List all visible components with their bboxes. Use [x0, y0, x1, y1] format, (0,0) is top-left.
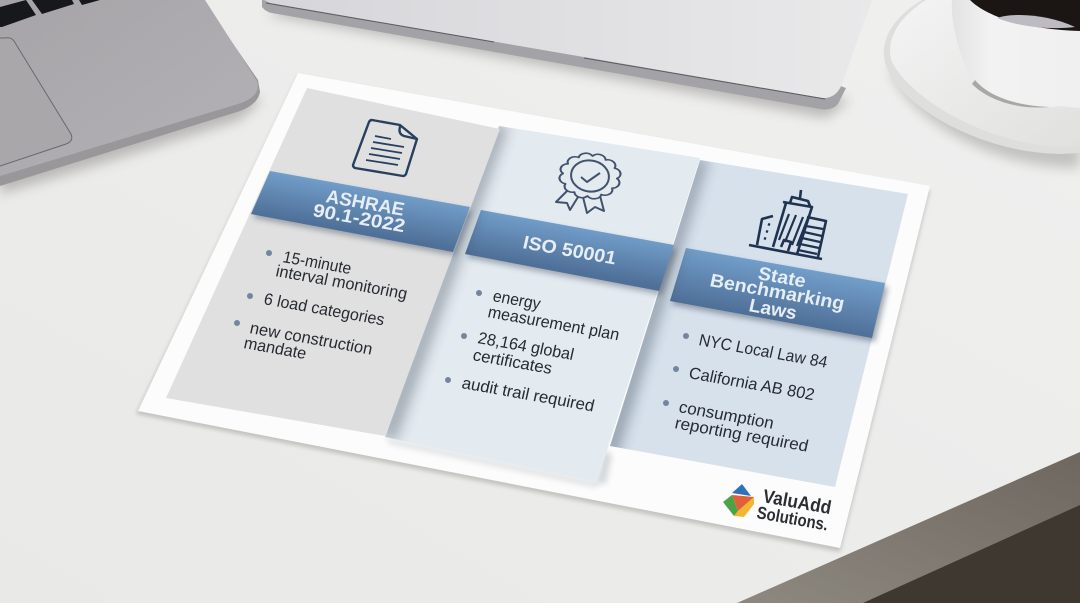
logo: valuadd solutions: [723, 484, 833, 535]
icon: document: [353, 120, 417, 176]
bullet list: iso: [445, 286, 621, 415]
band: ashrae: [251, 171, 470, 252]
shadow: ashrae panel onto iso panel: [381, 122, 507, 442]
shadow: iso band: [467, 214, 677, 295]
bullet list: state laws: California AB 802: [687, 363, 816, 404]
heading: state benchmarking laws: State: [756, 262, 808, 291]
heading: ashrae 90.1-2022: 90.1-2022: [311, 199, 407, 236]
shadow: state band: [672, 252, 888, 342]
bullet list: ashrae: 15-minute: [281, 247, 353, 278]
bullet list: ashrae: mandate: [242, 333, 308, 363]
desk edge and floor: [737, 452, 1080, 603]
shadow: ashrae band: [253, 175, 472, 256]
logo: valuadd solutions: Solutions.: [755, 502, 830, 535]
heading: state benchmarking laws: Benchmarking: [708, 269, 847, 314]
bullet list: iso: energy: [491, 286, 543, 313]
heading: iso 50001: ISO 50001: [521, 231, 618, 268]
icon: award ribbon: [556, 151, 623, 213]
bullet list: state laws: consumption: [677, 397, 776, 433]
heading: ashrae 90.1-2022: ASHRAE: [324, 185, 407, 220]
panel: ashrae: [166, 88, 500, 436]
shadow: iso panel onto state panel: [610, 160, 713, 449]
paper sheet: [136, 73, 930, 552]
bullet list: iso: 28,164 global: [476, 328, 576, 364]
bullet list: state laws: reporting required: [673, 413, 810, 456]
heading: state benchmarking laws: Laws: [747, 294, 799, 323]
bullet list: iso: audit trail required: [460, 373, 596, 415]
bullet list: ashrae: new construction: [248, 318, 374, 359]
heading: ashrae 90.1-2022: [311, 185, 407, 236]
bullet list: state laws: [663, 330, 829, 456]
bullet list: iso: measurement plan: [486, 302, 621, 344]
icon: office buildings: [749, 190, 826, 259]
panel: state benchmarking laws: [592, 156, 908, 490]
laptop left: [0, 0, 262, 194]
bullet list: iso: certificates: [471, 345, 554, 378]
coffee cup and saucer: [884, 0, 1080, 168]
heading: state benchmarking laws: [708, 262, 847, 323]
band: iso 50001: [465, 210, 674, 291]
panel: iso 50001: [381, 122, 700, 488]
bullet list: ashrae: 6 load categories: [262, 289, 386, 329]
bullet list: state laws: NYC Local Law 84: [697, 330, 829, 372]
band: state benchmarking laws: [670, 248, 885, 338]
bullet list: ashrae: [234, 247, 409, 363]
logo: valuadd solutions: ValuAdd: [761, 486, 833, 519]
laptop top: [262, 0, 872, 118]
bullet list: ashrae: interval monitoring: [274, 261, 409, 303]
